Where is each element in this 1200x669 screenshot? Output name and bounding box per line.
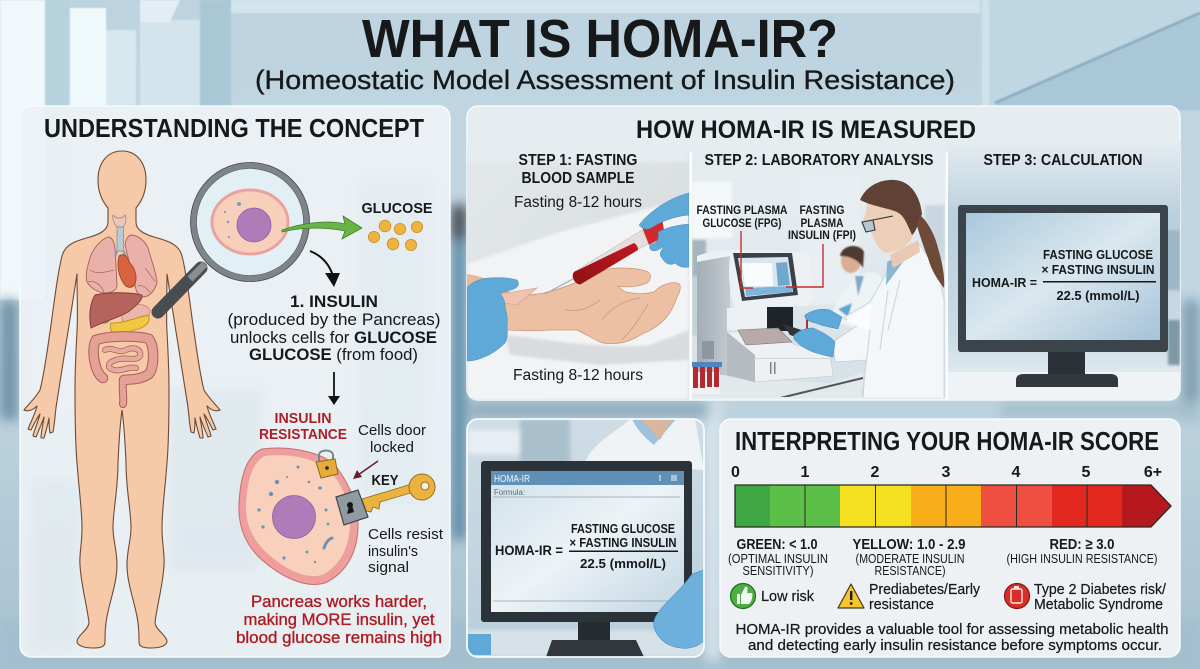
arrow: green to glucose (282, 216, 362, 239)
label: fasting plasma glucose (696, 203, 788, 230)
panel: monitor photo: HOMA-IR (494, 474, 530, 485)
arrow: down to insulin resistance (328, 372, 340, 405)
panel: monitor photo (467, 419, 704, 657)
scale numbers: 0 (731, 464, 740, 481)
hair (860, 180, 922, 235)
text block: insulin explanation (228, 293, 440, 364)
text: type 2 diabetes risk: Metabolic Syndrome (1034, 597, 1163, 613)
shirt collar (886, 243, 920, 285)
icon: glucose molecules (368, 220, 423, 251)
legend: yellow: RESISTANCE) (874, 563, 946, 578)
text block: insulin explanation: GLUCOSE (from food) (249, 346, 418, 364)
callout: pancreas works harder: making MORE insulin, yet (244, 611, 435, 629)
organs: liver (90, 293, 142, 328)
legend: green (728, 536, 828, 578)
icon: magnifying glass with cell (158, 162, 310, 312)
callout: pancreas works harder: Pancreas works harder, (251, 593, 427, 611)
photo: lab analyser and scientist (692, 180, 945, 397)
text block: insulin explanation: unlocks cells for GLUCOSE (230, 329, 437, 347)
formula: FASTING GLUCOSE (1043, 248, 1153, 262)
organs: lungs (86, 235, 157, 297)
label: cells door locked: Cells door (358, 423, 426, 439)
step 1: fasting blood sample (467, 140, 689, 400)
text: cells resist insulin's signal: signal (368, 560, 409, 576)
text block: insulin explanation: 1. INSULIN (290, 293, 378, 311)
background colleague (833, 246, 884, 332)
analyser screen (733, 253, 798, 301)
pointer lines (741, 231, 823, 288)
text: type 2 diabetes risk: Type 2 Diabetes risk/ (1034, 582, 1167, 598)
legend: green: GREEN: < 1.0 (736, 536, 818, 553)
formula on screen: FASTING GLUCOSE (571, 522, 675, 536)
glasses (862, 216, 893, 232)
callout: pancreas works harder (236, 593, 442, 647)
icon: key in lock (336, 474, 435, 525)
step 1 heading (518, 152, 638, 187)
legend: green: SENSITIVITY) (742, 563, 814, 578)
subtitle: (Homeostatic Model Assessment of Insulin Resistance) (255, 65, 955, 95)
text: prediabetes (869, 582, 981, 613)
text: low risk: Low risk (761, 589, 815, 605)
formula (972, 248, 1156, 303)
icon: monitor with formula (958, 205, 1168, 387)
label: fasting plasma glucose: FASTING PLASMA (696, 203, 788, 217)
organs: pancreas (110, 315, 149, 337)
organs: heart (118, 255, 136, 287)
icon: red diabetes alert (1004, 584, 1030, 608)
text: fasting hours top: Fasting 8-12 hours (514, 194, 642, 211)
label: fasting plasma insulin (788, 203, 856, 242)
step 1 heading: BLOOD SAMPLE (522, 170, 634, 187)
panel: how HOMA-IR is measured (467, 106, 1180, 400)
formula on screen: × FASTING INSULIN (570, 536, 676, 550)
formula: HOMA-IR = (972, 275, 1037, 290)
organs: stomach (122, 305, 150, 328)
analyser (697, 255, 730, 375)
arrow: pointing to locked door (353, 461, 378, 479)
legend: green: (OPTIMAL INSULIN (728, 551, 828, 566)
step 2: laboratory analysis (692, 140, 945, 400)
panel: understanding the concept (20, 106, 450, 657)
scale numbers: 5 (1082, 464, 1091, 481)
title (255, 9, 955, 95)
neck and face (890, 240, 920, 268)
scale numbers: 1 (801, 464, 810, 481)
tube slot and tray (767, 307, 793, 331)
scale numbers: 4 (1012, 464, 1021, 481)
scale numbers: 2 (871, 464, 880, 481)
hand (504, 268, 680, 344)
gloves (805, 309, 842, 329)
formula: × FASTING INSULIN (1042, 263, 1154, 277)
icon: resistant cell (239, 448, 358, 584)
text: cells resist insulin's signal: Cells resist (368, 527, 443, 543)
label: fasting plasma insulin: FASTING (800, 203, 844, 217)
photo: blood draw (467, 140, 689, 400)
photo: monitor backdrop (948, 140, 1180, 400)
label: insulin resistance: INSULIN (274, 410, 332, 427)
panel: interpreting your score (720, 419, 1180, 657)
legend: red (1006, 536, 1158, 566)
scientist coat (833, 245, 944, 398)
label: glucose: GLUCOSE (362, 200, 432, 217)
organs: trachea (113, 215, 126, 257)
panel: monitor photo: Formula: (494, 488, 525, 497)
text: summary note (736, 621, 1168, 654)
text: cells resist insulin's signal (368, 527, 443, 576)
organs: intestines (94, 336, 153, 404)
text: cells resist insulin's signal: insulin's (368, 544, 418, 560)
heading: how HOMA-IR is measured: HOW HOMA-IR IS MEASURED (636, 116, 976, 144)
step 3: calculation (948, 140, 1180, 400)
label: key: KEY (372, 473, 399, 489)
tube cap (642, 222, 664, 245)
label: fasting plasma insulin: PLASMA (800, 216, 844, 230)
text: prediabetes: resistance (869, 597, 934, 613)
label: insulin resistance: RESISTANCE (259, 426, 347, 443)
legend: yellow (852, 536, 966, 578)
scale numbers (731, 464, 1162, 481)
legend: yellow: YELLOW: 1.0 - 2.9 (852, 536, 966, 553)
colour scale bar (735, 485, 1171, 527)
formula on screen (495, 522, 678, 571)
label: cells door locked: locked (370, 440, 414, 456)
heading: understanding the concept: UNDERSTANDING THE CONCEPT (44, 115, 424, 143)
bench (692, 367, 863, 397)
step 1 heading: STEP 1: FASTING (518, 152, 638, 169)
tube (573, 230, 649, 284)
label: fasting plasma insulin: INSULIN (FPI) (788, 228, 856, 242)
scale numbers: 3 (942, 464, 951, 481)
legend: yellow: (MODERATE INSULIN (856, 551, 964, 566)
main heading: WHAT IS HOMA-IR? (362, 9, 838, 69)
text: fasting hours bottom: Fasting 8-12 hours (513, 367, 643, 384)
arrow: curved to insulin (310, 251, 340, 287)
gloved hand lower left (467, 278, 518, 361)
icon: thumbs up (730, 584, 756, 608)
formula on screen: HOMA-IR = (495, 543, 563, 558)
icon: warning triangle (838, 584, 864, 608)
formula on screen: 22.5 (mmol/L) (580, 557, 666, 571)
text: summary note: and detecting early insulin resistance before symptoms occur. (748, 637, 1162, 654)
label: fasting plasma glucose: GLUCOSE (FPG) (702, 216, 782, 230)
step 2 heading: STEP 2: LABORATORY ANALYSIS (704, 152, 934, 169)
text block: insulin explanation: (produced by the Pancreas) (228, 311, 440, 329)
bandage (500, 288, 537, 305)
human body illustration (24, 151, 220, 648)
step 3 heading: STEP 3: CALCULATION (984, 152, 1142, 169)
label: cells door locked (358, 423, 426, 456)
organs: gallbladder (99, 318, 109, 324)
callout: pancreas works harder: blood glucose remains high (236, 629, 442, 647)
sample rack (692, 362, 722, 394)
icon: padlock (316, 450, 338, 478)
gloved hand upper right (639, 193, 689, 267)
text: prediabetes: Prediabetes/Early (869, 582, 981, 598)
text: summary note: HOMA-IR provides a valuable tool for assessing metabolic health (736, 621, 1168, 638)
formula: 22.5 (mmol/L) (1056, 289, 1140, 303)
legend: red: (HIGH INSULIN RESISTANCE) (1006, 551, 1158, 566)
scale numbers: 6+ (1144, 464, 1162, 481)
label: insulin resistance (259, 410, 347, 443)
text: type 2 diabetes risk (1034, 582, 1167, 613)
legend: red: RED: ≥ 3.0 (1050, 536, 1114, 553)
